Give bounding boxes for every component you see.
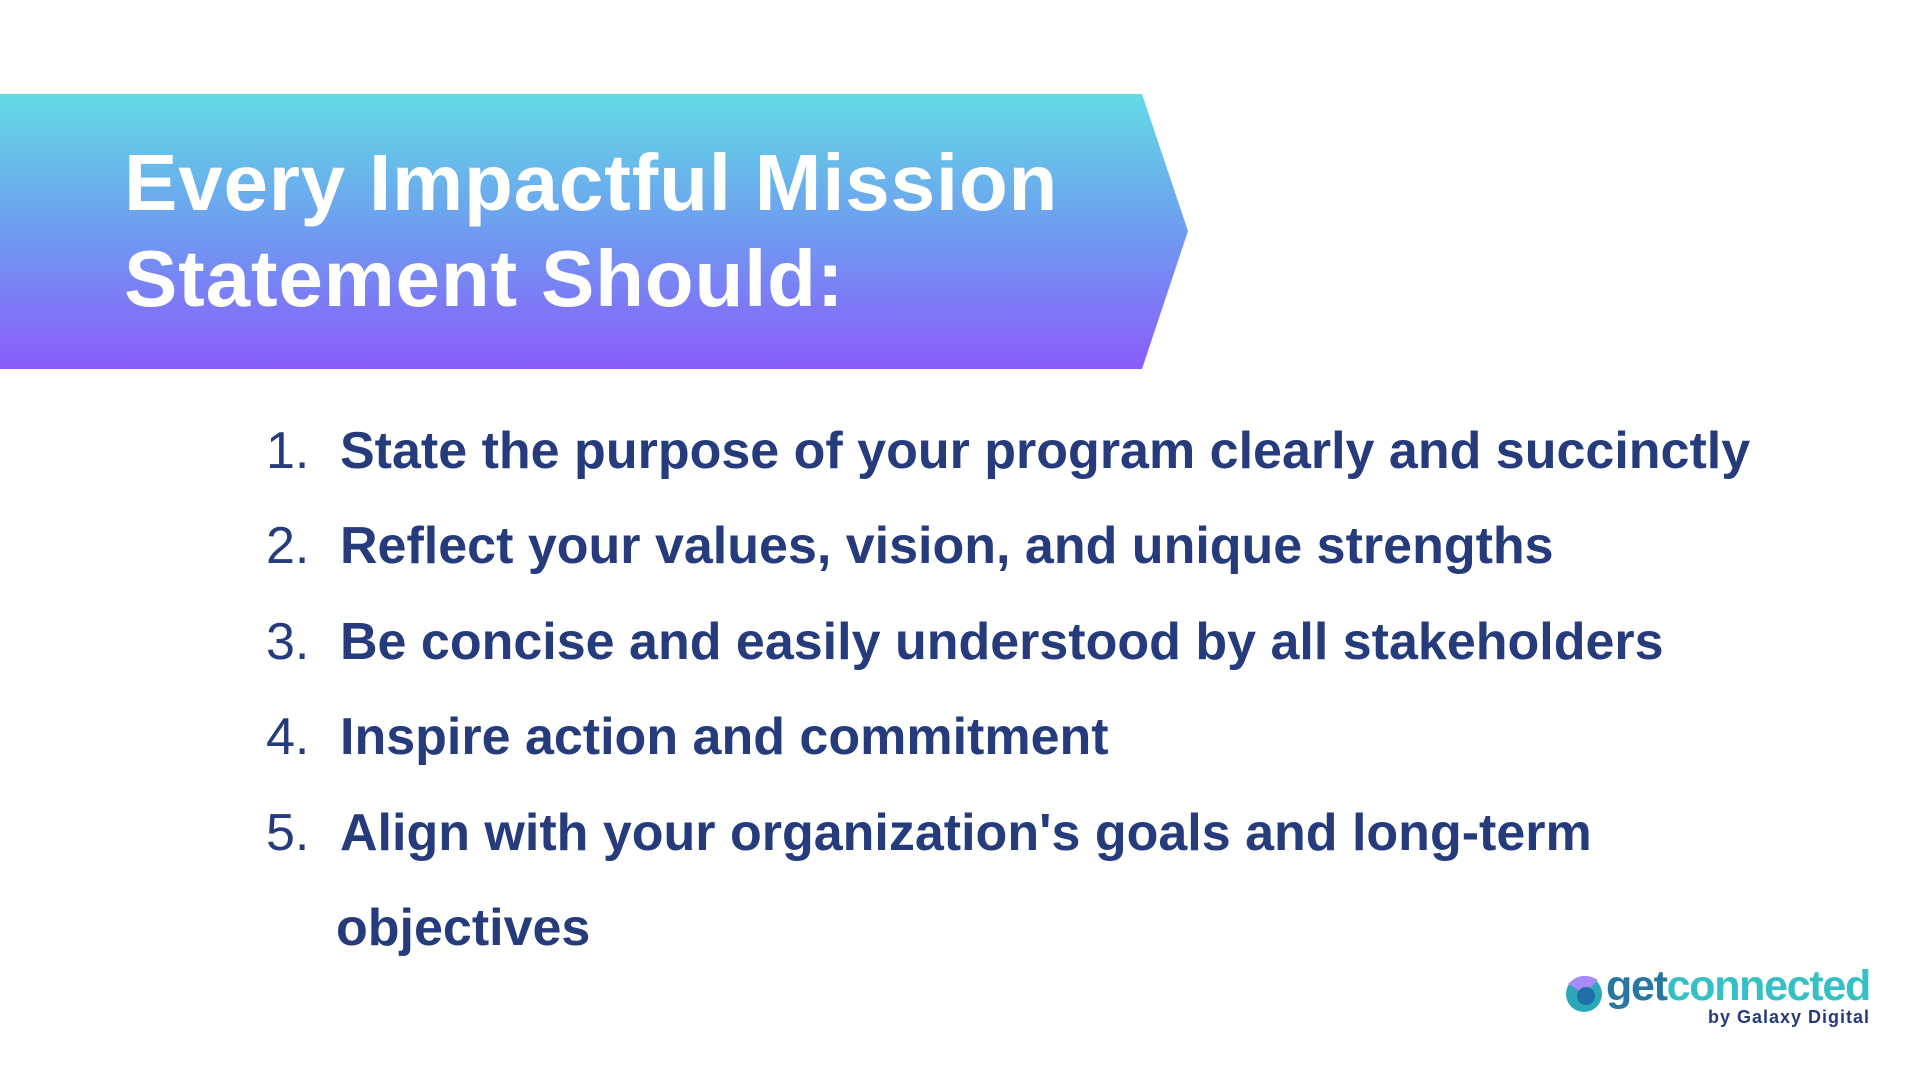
title: Every Impactful Mission	[124, 138, 1058, 227]
list item 2	[266, 517, 1554, 575]
text: 1.	[266, 422, 309, 480]
icon: logo mark	[1566, 976, 1602, 1012]
list item 5: 5.	[266, 804, 309, 862]
text: 2.	[266, 517, 309, 575]
logo	[1566, 962, 1870, 1027]
list item 3	[266, 613, 1664, 671]
banner	[0, 94, 1188, 369]
text: Reflect your values, vision, and unique strengths	[340, 517, 1554, 575]
title: Statement Should:	[124, 234, 844, 323]
text: State the purpose of your program clearly and succinctly	[340, 422, 1750, 480]
title	[124, 138, 1058, 323]
list item 4	[266, 708, 1109, 766]
list item 5: objectives	[336, 899, 590, 957]
list item 1	[266, 422, 1750, 480]
logo: getconnected	[1606, 962, 1870, 1010]
text: Inspire action and commitment	[340, 708, 1109, 766]
text: Be concise and easily understood by all stakeholders	[340, 613, 1664, 671]
logo: by Galaxy Digital	[1708, 1007, 1870, 1027]
list item 5	[266, 804, 1592, 957]
list item 5: Align with your organization's goals and long-term	[340, 804, 1592, 862]
text: 4.	[266, 708, 309, 766]
text: 3.	[266, 613, 309, 671]
